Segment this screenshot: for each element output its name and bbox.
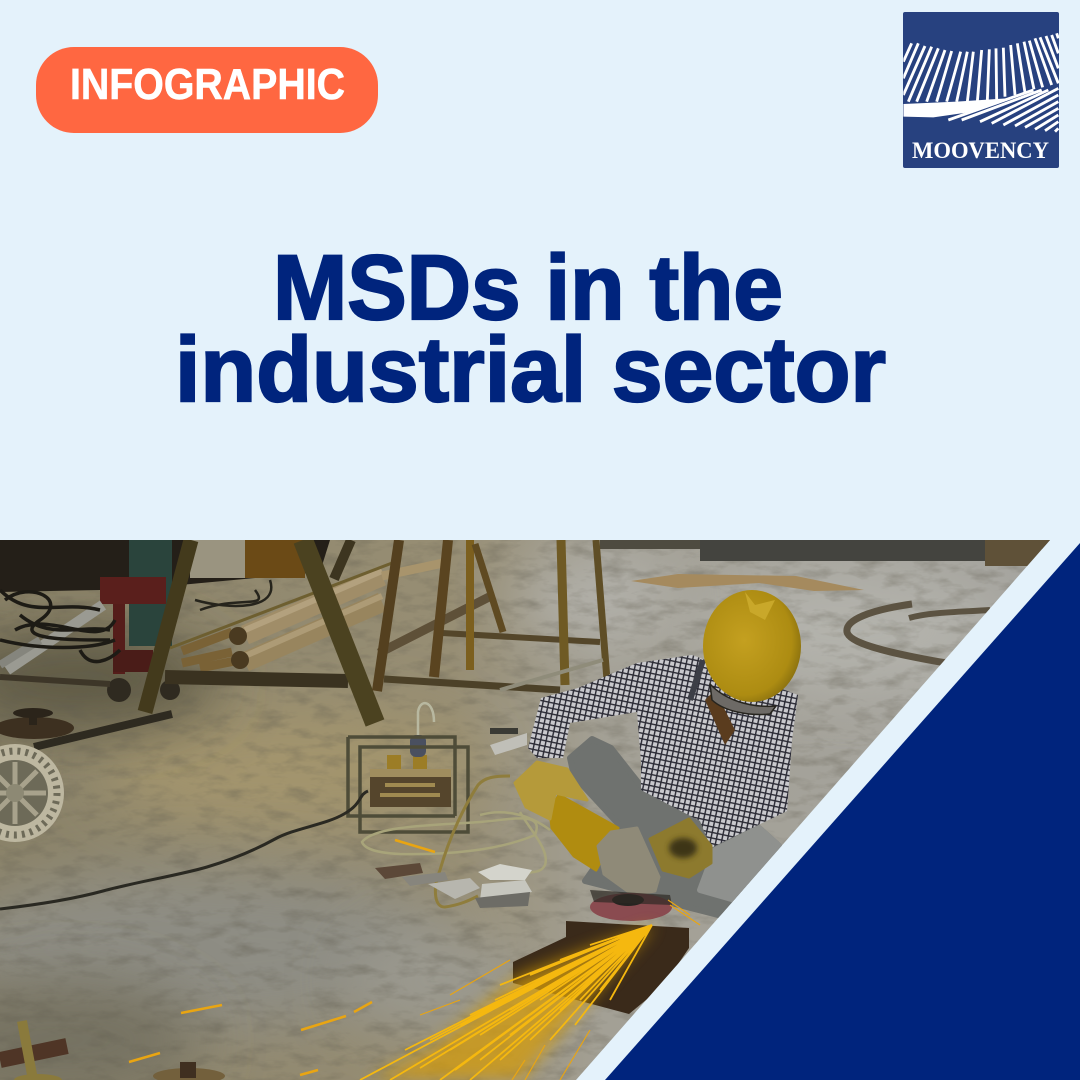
safety goggles <box>710 684 776 714</box>
title: MSDs in the <box>273 237 783 339</box>
wire spool <box>0 744 64 842</box>
badge: INFOGRAPHIC: INFOGRAPHIC <box>70 60 345 109</box>
grinding disc <box>590 890 672 921</box>
helmet <box>703 590 801 702</box>
photo: worker grinding metal in a workshop <box>0 540 1080 1080</box>
neck and face <box>700 670 776 730</box>
title: industrial sector <box>175 319 886 421</box>
cables and silver pipe left <box>0 580 271 670</box>
stacked pipes <box>170 560 448 669</box>
worker <box>515 590 801 921</box>
scrap plate on floor <box>631 574 864 591</box>
cable loops <box>362 812 550 875</box>
badge: INFOGRAPHIC <box>36 47 378 133</box>
curved metal strips <box>847 604 990 663</box>
work block <box>513 921 689 1014</box>
bottom left fittings <box>0 1021 225 1080</box>
sparks <box>360 900 700 1080</box>
power box <box>348 703 468 832</box>
title <box>175 237 886 421</box>
steel stands <box>0 540 607 723</box>
logo: Moovency <box>903 12 1059 168</box>
navy diagonal corner panel <box>605 543 1080 1080</box>
logo: Moovency: MOOVENCY <box>912 138 1049 163</box>
orange spark streaks on floor <box>129 840 435 1075</box>
dark machinery top left <box>0 540 330 702</box>
floor cable <box>0 791 368 909</box>
shirt <box>528 655 798 848</box>
trousers <box>570 739 779 916</box>
left glove <box>515 762 587 819</box>
flange and dark bar <box>0 708 172 747</box>
back wall and roller <box>600 540 1050 566</box>
grinder body <box>550 795 618 870</box>
grinder cable <box>435 776 510 907</box>
right glove <box>650 819 711 877</box>
grinder head <box>598 828 659 895</box>
metal pieces on floor <box>375 728 532 908</box>
